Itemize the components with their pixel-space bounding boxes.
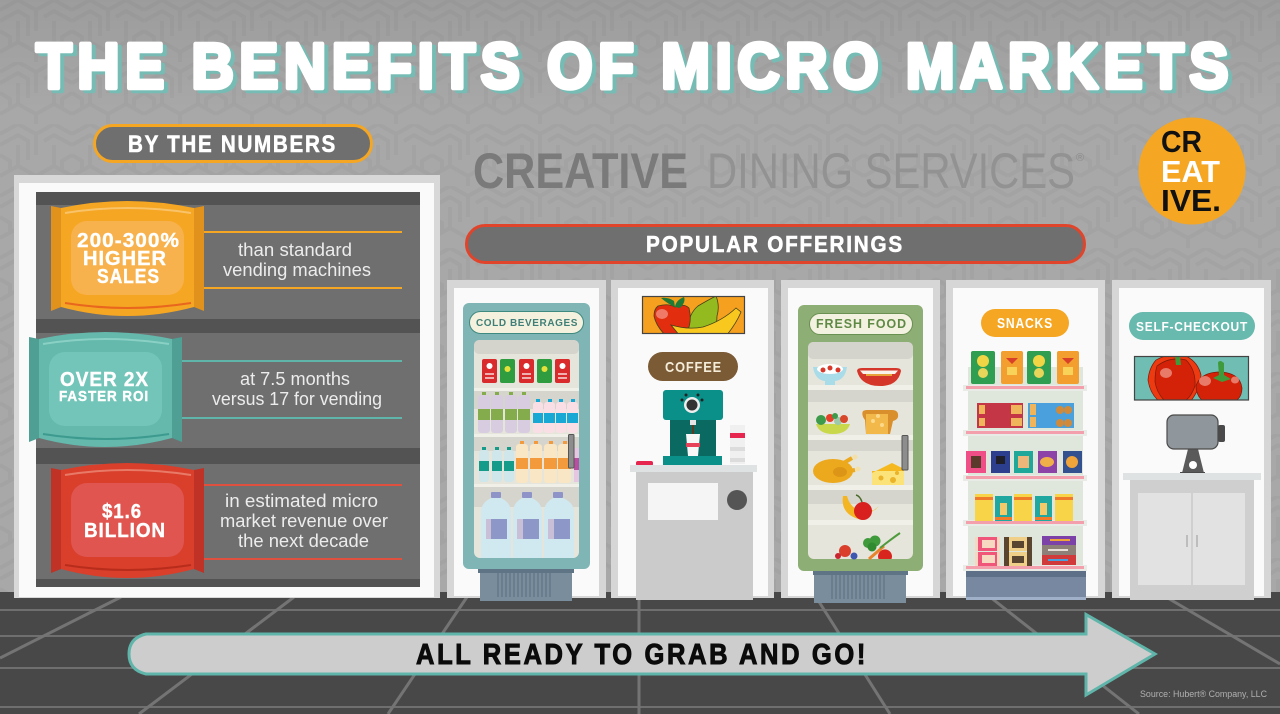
snacks: fourth shelf bags	[975, 494, 1073, 521]
snacks: top shelf chip bags	[971, 351, 1079, 384]
stat text: than standard vending machines: than standard	[238, 239, 352, 260]
sign: coffee	[648, 352, 738, 381]
heading pill: by the numbers	[94, 126, 372, 162]
fridge glass	[474, 340, 579, 558]
panel: fresh food	[781, 280, 940, 603]
checkout counter	[1123, 473, 1261, 600]
logo: creative dining services: ®	[1076, 152, 1084, 164]
stat text: estimated micro market revenue	[204, 485, 402, 559]
panel: coffee	[611, 280, 774, 600]
source note: Source: Hubert® Company, LLC	[1140, 689, 1267, 699]
stat bag: over 2x faster roi: OVER 2X	[60, 369, 149, 391]
stat text: at 7.5 months versus 17 for vending: at 7.5 months	[240, 368, 350, 389]
water jugs	[481, 492, 574, 558]
fridge base	[478, 569, 574, 601]
food: berries and vegetables	[835, 533, 900, 560]
sign: cold beverages	[470, 312, 584, 334]
tiled floor	[0, 592, 1280, 714]
sign: coffee: COFFEE	[665, 359, 722, 376]
logo badge: creative: IVE.	[1161, 183, 1221, 218]
picture: fruit	[642, 296, 745, 336]
stat bag: over 2x faster roi: FASTER ROI	[59, 388, 149, 405]
picture: pepper and tomato	[1134, 355, 1249, 402]
cup stack	[730, 425, 745, 464]
sign: fresh food: FRESH FOOD	[816, 316, 907, 331]
snacks: third shelf bags	[966, 451, 1082, 473]
stat bag: 200-300% higher sales: SALES	[97, 266, 160, 288]
panel: cold beverages	[447, 280, 606, 601]
snack shelving unit	[963, 367, 1087, 600]
checkout scanner	[1167, 415, 1225, 474]
stat text: estimated micro market revenue: in estimated micro	[225, 490, 378, 511]
food: chicken and cheese	[813, 454, 904, 485]
food: salad and bread	[816, 410, 898, 434]
logo: creative dining services	[473, 143, 1084, 199]
stat text: estimated micro market revenue: the next decade	[238, 530, 369, 551]
logo badge: creative: CR	[1161, 124, 1202, 159]
logo: creative dining services: DINING SERVICES	[707, 143, 1075, 199]
sign: snacks	[981, 309, 1069, 337]
food: banana and apple	[843, 495, 879, 520]
stat bag: 200-300% higher sales: 200-300%	[77, 230, 180, 252]
sign: fresh food	[810, 314, 912, 334]
stat bag: over 2x faster roi	[29, 332, 182, 447]
panel: by the numbers	[14, 175, 440, 598]
sign: self-checkout: SELF-CHECKOUT	[1136, 319, 1248, 334]
stat bag: 200-300% higher sales	[51, 201, 204, 316]
bottles: third shelf	[479, 434, 579, 483]
food: bowls	[813, 364, 901, 386]
heading pill: popular offerings	[466, 226, 1084, 262]
fridge body	[463, 303, 590, 569]
arrow: all ready to grab and go	[129, 614, 1155, 695]
sign: self-checkout	[1129, 312, 1255, 340]
fridge body	[798, 305, 923, 571]
stat text: estimated micro market revenue: market revenue over	[220, 510, 388, 531]
fridge base	[813, 571, 908, 603]
snacks: second shelf boxes	[977, 403, 1074, 428]
coffee machine	[663, 390, 723, 465]
logo badge: creative	[1138, 118, 1246, 224]
fridge glass	[808, 342, 913, 559]
bottles: second shelf	[478, 392, 578, 433]
heading pill: popular offerings: POPULAR OFFERINGS	[646, 231, 904, 257]
arrow: all ready to grab and go: ALL READY TO GRAB AND GO!	[416, 639, 868, 671]
sign: cold beverages: COLD BEVERAGES	[476, 317, 578, 329]
stat text: than standard vending machines: vending machines	[223, 259, 371, 280]
snacks: bottom shelf boxes	[975, 536, 1076, 566]
stat bag: $1.6 billion	[51, 463, 204, 578]
sign: snacks: SNACKS	[997, 315, 1053, 332]
fridge handle	[902, 436, 908, 470]
panel: snacks	[946, 280, 1105, 600]
heading pill: by the numbers: BY THE NUMBERS	[128, 131, 337, 158]
stat text: than standard vending machines	[204, 232, 402, 288]
panel: self-checkout	[1112, 280, 1271, 600]
coffee counter	[630, 461, 757, 600]
logo: creative dining services: CREATIVE	[473, 143, 688, 199]
stat text: at 7.5 months versus 17 for vending	[182, 361, 402, 418]
soda cans	[482, 359, 570, 383]
stat text: at 7.5 months versus 17 for vending: versus 17 for vending	[212, 388, 382, 409]
stat bag: 200-300% higher sales: HIGHER	[83, 248, 167, 270]
stat bag: $1.6 billion: $1.6	[102, 501, 142, 523]
stat bag: $1.6 billion: BILLION	[84, 520, 166, 542]
logo badge: creative: EAT	[1161, 154, 1220, 189]
